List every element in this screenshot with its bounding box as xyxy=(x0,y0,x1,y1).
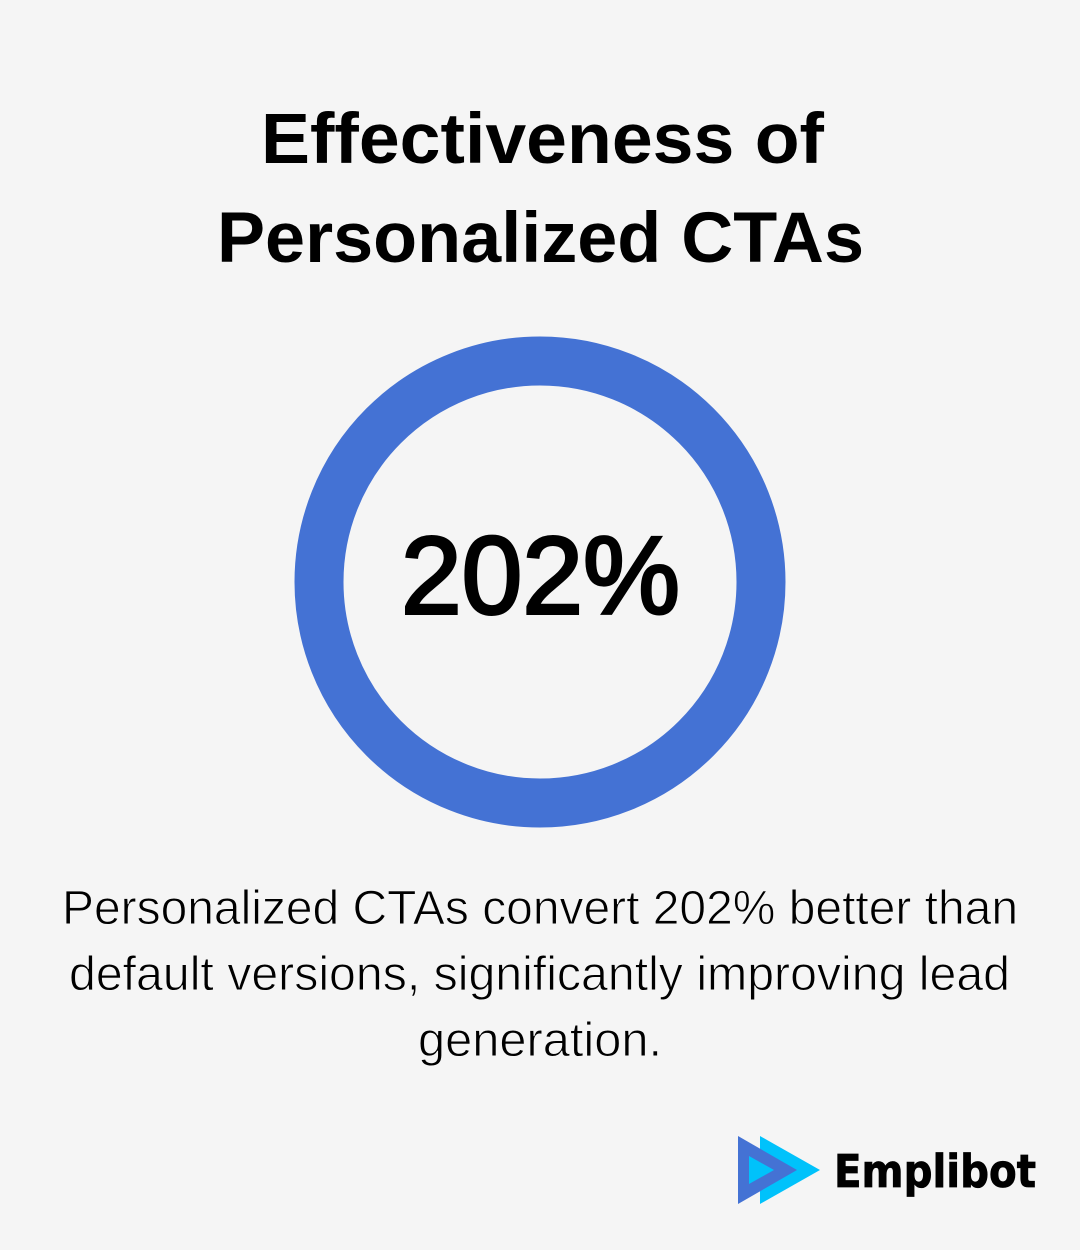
description text: default versions, significantly improving lead xyxy=(69,948,1010,1001)
logo: Emplibot xyxy=(738,1136,1036,1204)
logo wordmark: Emplibot xyxy=(834,1145,1036,1198)
title: Personalized CTAs xyxy=(217,199,864,278)
donut ring with stat xyxy=(319,361,761,803)
description text: Personalized CTAs convert 202% better than xyxy=(62,882,1018,935)
title: Effectiveness of xyxy=(261,100,824,179)
icon: play triangles xyxy=(738,1136,820,1204)
stat value: 202% xyxy=(401,514,680,638)
title xyxy=(217,100,864,278)
description text: generation. xyxy=(418,1014,662,1067)
description text xyxy=(62,882,1018,1067)
